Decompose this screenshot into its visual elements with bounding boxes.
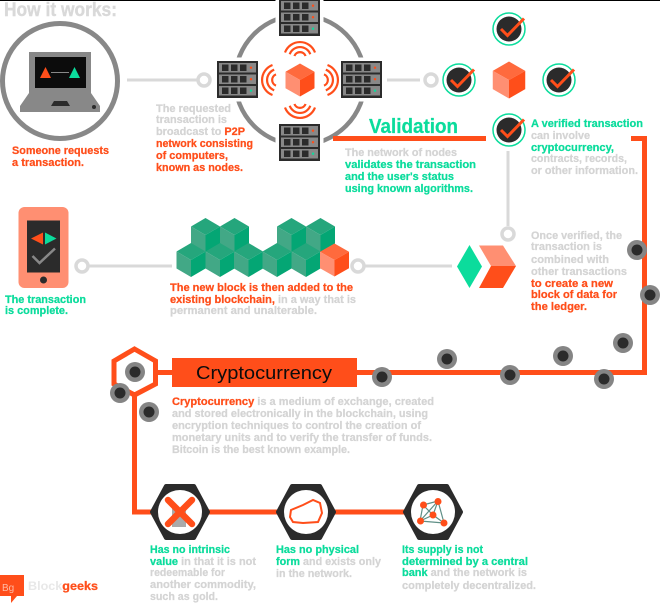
text: cryptocurrency description: monetary units and to verify the transfer of funds. <box>172 432 432 444</box>
text: cryptocurrency description: Cryptocurrency is a medium of exchange, created <box>172 396 434 408</box>
heading: cryptocurrency banner: Cryptocurrency <box>196 363 332 383</box>
text: transaction complete: is complete. <box>5 305 68 317</box>
text: no intrinsic value <box>150 544 256 603</box>
text: transaction complete: The transaction <box>5 294 86 306</box>
text: once verified: combined with <box>531 254 609 266</box>
connector: block to chain <box>352 260 452 272</box>
text: decentralized supply: determined by a central <box>402 556 528 568</box>
text: verified transaction <box>531 118 643 177</box>
text: broadcast to P2P: network consisting <box>156 138 253 150</box>
text: transaction complete <box>5 294 86 317</box>
text: broadcast to P2P: The requested <box>156 103 231 115</box>
text: once verified <box>531 230 627 313</box>
text: validation description <box>345 147 476 195</box>
text: someone requests <box>12 145 109 169</box>
text: cryptocurrency description: Bitcoin is the best known example. <box>172 444 350 456</box>
logo: Blockgeeks <box>0 575 98 603</box>
icon: decentralized network <box>405 486 461 538</box>
text: decentralized supply <box>402 544 536 592</box>
text: broadcast to P2P: of computers, <box>156 150 228 162</box>
icon: laptop in circle <box>2 24 118 138</box>
text: no intrinsic value: such as gold. <box>150 591 218 603</box>
heading: cryptocurrency banner <box>172 358 392 387</box>
text: new block added: permanent and unalterable. <box>170 305 317 317</box>
text: verified transaction: contracts, records, <box>531 153 627 165</box>
text: once verified: to create a new <box>531 278 613 290</box>
connector: laptop to network <box>127 74 210 86</box>
text: validation description: using known algorithms. <box>345 183 473 195</box>
text: no intrinsic value: Has no intrinsic <box>150 544 230 556</box>
icon: no intrinsic value <box>152 486 208 538</box>
text: cryptocurrency description <box>172 396 434 456</box>
icon: diamond and chevron block <box>457 245 516 288</box>
orange path: timeline <box>134 138 644 512</box>
text: broadcast to P2P <box>156 103 253 174</box>
diagram: P2P network of nodes <box>214 0 386 164</box>
logo: Blockgeeks: Blockgeeks <box>28 579 98 593</box>
text: no physical form: Has no physical <box>276 544 359 556</box>
text: no physical form <box>276 544 382 580</box>
text: decentralized supply: bank and the network is <box>402 567 527 579</box>
text: once verified: the ledger. <box>531 301 587 313</box>
text: verified transaction: cryptocurrency, <box>531 142 614 154</box>
text: new block added: existing blockchain, in a way that is <box>170 294 356 306</box>
text: validation description: validates the transaction <box>345 159 476 171</box>
text: once verified: Once verified, the <box>531 230 622 242</box>
text: someone requests: a transaction. <box>12 157 84 169</box>
text: decentralized supply: completely decentralized. <box>402 580 536 592</box>
text: no physical form: form and exists only <box>276 556 382 568</box>
icon: hexagon with dots <box>110 349 159 422</box>
text: cryptocurrency description: encryption techniques to control the creation of <box>172 420 421 432</box>
text: verified transaction: or other information. <box>531 165 638 177</box>
text: cryptocurrency description: and stored electronically in the blockchain, using <box>172 408 428 420</box>
text: new block added: The new block is then added to the <box>170 282 353 294</box>
text: someone requests: Someone requests <box>12 145 109 157</box>
text: new block added <box>170 282 356 317</box>
connector: network to validation <box>387 74 437 86</box>
title: How it works: <box>4 0 117 21</box>
text: once verified: block of data for <box>531 289 618 301</box>
text: decentralized supply: Its supply is not <box>402 544 483 556</box>
icon: no physical form <box>278 486 334 538</box>
text: validation description: The network of nodes <box>345 147 457 159</box>
connector: verified to new block <box>502 151 514 240</box>
icon: verified cube with checks <box>443 13 575 146</box>
text: once verified: other transactions <box>531 266 627 278</box>
text: broadcast to P2P: known as nodes. <box>156 162 243 174</box>
text: no physical form: in the network. <box>276 568 352 580</box>
logo: Blockgeeks: Bg <box>2 583 14 594</box>
text: validation description: and the user's status <box>345 171 454 183</box>
text: broadcast to P2P: broadcast to P2P <box>156 126 245 138</box>
text: no intrinsic value: redeemable for <box>150 567 226 579</box>
icon: phone <box>18 207 68 288</box>
timeline dots <box>437 240 660 389</box>
text: no intrinsic value: value in that it is not <box>150 556 256 568</box>
heading: validation: Validation <box>369 116 458 138</box>
connector: chain to phone <box>76 260 172 272</box>
text: verified transaction: A verified transaction <box>531 118 643 130</box>
text: broadcast to P2P: transaction is <box>156 114 227 126</box>
text: verified transaction: can involve <box>531 130 590 142</box>
icon: blockchain cubes <box>176 218 349 277</box>
text: no intrinsic value: another commodity, <box>150 579 256 591</box>
text: once verified: transaction is <box>531 241 602 253</box>
